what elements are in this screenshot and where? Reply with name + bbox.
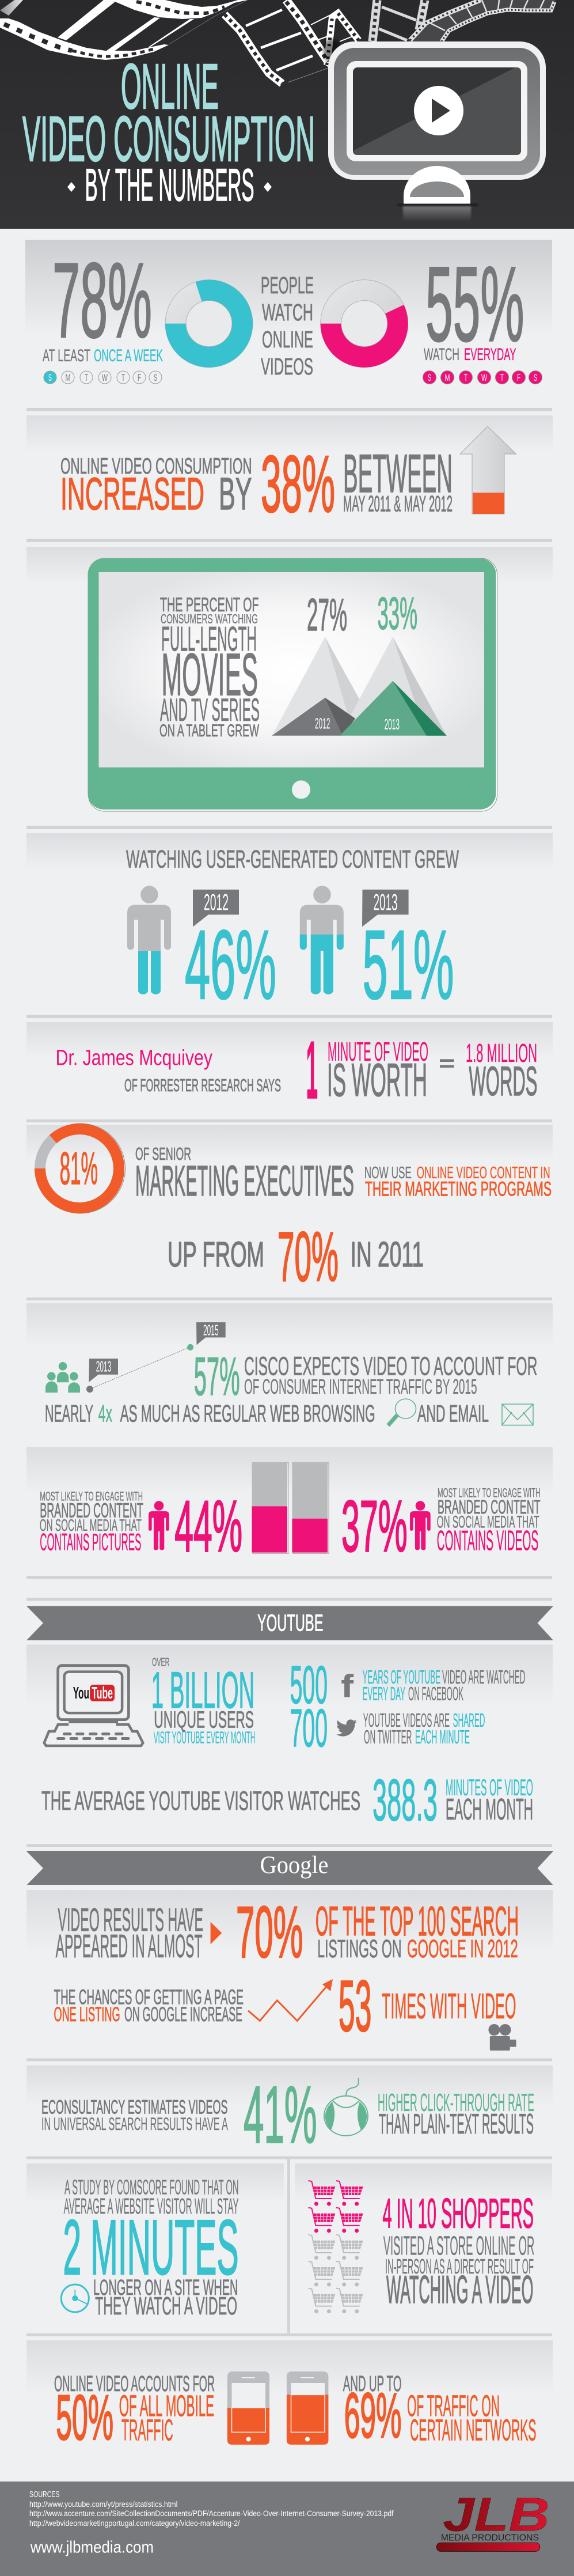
panel: James Mcquivey quote: MINUTE OF VIDEO [328,1037,428,1066]
panel: senior marketing executives: 70% [278,1217,339,1296]
weekday dots: once a week [44,371,162,384]
chart: bar 44% [252,1462,288,1553]
equals sign [440,1059,454,1068]
logo: JLB Media Productions [436,2488,549,2551]
icon: pink person right [410,1501,431,1550]
panel: branded content engagement [26,1447,553,1567]
panel: tablet movies: MOVIES [161,642,258,709]
icon: person 2013 [300,886,344,994]
text: pictures audience: ON SOCIAL MEDIA THAT [40,1516,142,1535]
icon: monitor with play button [324,39,546,221]
panel: Cisco forecast: 57% [194,1346,240,1406]
panel: tablet movies: FULL-LENGTH [161,620,257,658]
film strip: top grey frames [372,0,425,41]
panel: mobile traffic: 50% [56,2382,113,2453]
panel: comScore study: AVERAGE A WEBSITE VISITOR WILL STAY [64,2195,239,2219]
panel: shoppers [295,2163,552,2313]
weekday dots: once a week: F [138,372,141,383]
weekday dots: once a week: S [154,372,157,383]
icon: computer mouse [324,2078,368,2136]
text: unique users: UNIQUE USERS [154,1706,254,1733]
icon: phone 50% [227,2371,269,2445]
panel: Google stats: VIDEO RESULTS HAVE [58,1901,203,1938]
text: and email: AND EMAIL [417,1400,489,1427]
panel: senior marketing executives: 81% [60,1143,98,1194]
text: up from: UP FROM [168,1235,264,1274]
icon: video camera [488,2024,516,2051]
icon: clock [61,2284,89,2312]
header banner [0,0,574,229]
text: percent of consumers [159,594,260,740]
panel: Google stats: 70% [236,1892,303,1973]
text: pictures audience [40,1489,143,1556]
panel: mobile traffic: TRAFFIC [121,2414,173,2448]
panel: weekly and daily viewers: 78% [52,241,152,360]
icon: pink person left [149,1501,169,1550]
panel: YouTube stats: 500 [290,1655,328,1715]
text: videos audience [437,1486,540,1557]
panel: weekly and daily viewers [25,240,552,384]
panel: branded content engagement: 44% [174,1485,242,1567]
weekday dots: everyday: T [500,372,504,383]
centre text: people watch online videos: WATCH [262,299,313,326]
weekday dots: once a week: T [85,372,88,383]
label: everyday: EVERYDAY [464,345,516,364]
panel: econsultancy click-through [26,2066,553,2160]
weekday dots: once a week: W [102,372,108,383]
text: one listing: ONE LISTING [54,2003,120,2026]
panel: mobile traffic [26,2340,553,2453]
panel: 38% increase: 38% [261,439,335,529]
donut chart: 78% [165,280,253,368]
text: pictures audience: BRANDED CONTENT [40,1499,143,1522]
text: on google increase: ON GOOGLE INCREASE [124,2003,242,2026]
panel: James Mcquivey quote: IS WORTH [327,1054,427,1106]
panel: YouTube stats: YOUTUBE VIDEOS ARE [363,1709,450,1731]
panel: econsultancy click-through: 41% [244,2070,317,2160]
callout: 2013: 2013 [374,890,398,915]
panel: user-generated content [26,833,553,1000]
weekday dots: everyday: T [464,372,467,383]
weekday dots: everyday: S [534,372,537,383]
panel: branded content engagement: CONTAINS PICTURES [40,1529,141,1556]
weekday dots: everyday: M [444,372,450,383]
weekday dots: once a week: M [66,372,70,383]
panel: tablet movies [26,547,553,811]
text: by: BY [219,468,252,519]
text: of senior: OF SENIOR [135,1144,191,1164]
callout: 2012 [193,890,239,926]
text: percent of consumers: THE PERCENT OF [160,594,259,616]
weekday dots: once a week: T [121,372,125,383]
name: Dr. James Mcquivey [56,1046,212,1071]
text: online video consumption: ONLINE VIDEO CONSUMPTION [60,454,252,479]
panel: YouTube stats: YEARS OF YOUTUBE [363,1666,440,1688]
banner: YouTube: YOUTUBE [257,1609,324,1636]
panel: James Mcquivey quote: 1 [306,1024,318,1116]
callout: 2013 [362,890,409,926]
YouTube logo: You [73,1684,89,1703]
film strip: right curved ribbon [409,0,556,41]
callout: 2012: 2012 [204,890,229,915]
icon: magnifying glass [388,1399,416,1425]
label: once a week: ONCE A WEEK [94,346,163,365]
weekday dots: once a week: S [48,372,52,383]
text: longer on a site when: LONGER ON A SITE WHEN [93,2276,238,2300]
sources list [29,2490,394,2528]
panel: 38% increase [26,415,553,529]
panel: tablet movies: AND TV SERIES [160,691,260,728]
weekday dots: everyday: F [517,372,520,383]
panel: branded content engagement: 37% [341,1485,408,1567]
panel: mobile traffic: ONLINE VIDEO ACCOUNTS FOR [54,2372,215,2396]
panel: Cisco forecast [26,1303,553,1427]
panel: user-generated content: 51% [363,910,454,1020]
logo: JLB Media Productions: JLB [443,2488,549,2541]
sources list: http://www.youtube.com/yt/press/statistics.html [29,2500,177,2509]
panel: YouTube stats: EACH MINUTE [415,1726,470,1747]
source: OF FORRESTER RESEARCH SAYS [124,1076,281,1095]
panel: user-generated content: 46% [185,910,276,1020]
text: pictures audience: MOST LIKELY TO ENGAGE WITH [40,1489,143,1504]
text: percent of consumers: ON A TABLET GREW [159,721,259,740]
banner: Google: Google [260,1852,328,1879]
icon: person 2012 [127,886,171,994]
logo: JLB Media Productions: MEDIA PRODUCTIONS [441,2533,539,2543]
website: www.jlbmedia.com [30,2539,154,2557]
text: now use: NOW USE [364,1164,412,1182]
text: universal search: IN UNIVERSAL SEARCH RESULTS HAVE A [41,2113,228,2134]
centre text: people watch online videos [261,272,314,380]
icon: group of people [45,1362,80,1393]
text: econsultancy estimates: ECONSULTANCY ESTIMATES VIDEOS [41,2096,228,2118]
sources list: SOURCES [29,2490,60,2499]
chart: mountains 2012 vs 2013 [272,637,447,736]
weekday dots: everyday: S [428,372,431,383]
weekday dots: everyday: W [481,372,487,383]
text: listings on: LISTINGS ON [317,1935,402,1963]
text: 4x: 4x [98,1400,112,1427]
panel: Google stats: 53 [339,1965,371,2047]
icon: tablet [88,558,497,811]
title [22,51,315,210]
icon: zigzag growth arrow [248,1979,333,2021]
film strip: left ribbon [0,0,248,60]
callout: 2015: 2015 [203,1321,219,1338]
icon: growth arrow [460,426,516,514]
panel: YouTube stats: ON FACEBOOK [408,1683,463,1704]
panel: YouTube stats: 388.3 [372,1766,438,1833]
callout: 2013 [89,1358,118,1382]
chart: mountains 2012 vs 2013: 2012 [315,715,330,732]
icon: computer with YouTube logo [44,1666,143,1746]
panel: Google stats [26,1890,553,2051]
label: watch: WATCH [424,345,459,364]
label: at least: AT LEAST [43,346,90,365]
icon: shopping carts 4 of 10 [308,2181,363,2313]
text: increased: INCREASED [60,468,204,519]
icon: facebook f: f [341,1668,353,1704]
panel: tablet movies: 33% [378,588,417,638]
YouTube logo: Tube [92,1684,113,1703]
banner: Google [26,1851,553,1885]
centre text: people watch online videos: PEOPLE [261,272,314,298]
panel: comScore study: A STUDY BY COMSCORE FOUND THAT ON [64,2175,239,2199]
panel: YouTube stats [26,1644,553,1833]
panel: YouTube stats: 1 BILLION [151,1661,254,1719]
panel: comScore study: 2 MINUTES [63,2204,239,2291]
banner: YouTube [26,1606,553,1640]
film strip: centre ribbon [225,0,359,84]
panel: YouTube stats: 700 [290,1698,328,1758]
title: BY THE NUMBERS [85,159,254,210]
icon: orange pointer [211,1922,222,1944]
panel: YouTube stats: EVERY DAY [363,1683,405,1704]
panel: tablet movies: 27% [307,589,347,640]
text: in 2011: IN 2011 [350,1235,424,1274]
text: nearly: NEARLY [45,1400,93,1427]
panel: mobile traffic: AND UP TO [343,2372,402,2396]
text: percent of consumers: CONSUMERS WATCHING [161,611,258,626]
callout: 2013: 2013 [96,1358,111,1375]
panel: mobile traffic: OF ALL MOBILE [119,2390,214,2423]
panel: Google stats: APPEARED IN ALMOST [56,1928,203,1964]
monitor stand [397,166,478,221]
text: they watch a video: THEY WATCH A VIDEO [95,2293,237,2320]
centre text: people watch online videos: ONLINE [262,326,313,353]
icon: phone 69% [287,2371,328,2445]
panel: James Mcquivey quote [26,1022,553,1116]
chart: bar 37% [292,1462,329,1553]
sources list: http://webvideomarketingportugal.com/category/video-marketing-2/ [29,2519,240,2528]
panel: mobile traffic: 69% [344,2381,402,2452]
icon: twitter bird [336,1719,357,1737]
centre text: people watch online videos: VIDEOS [261,353,313,380]
panel: senior marketing executives [26,1124,553,1296]
text: chances of getting a page: THE CHANCES OF GETTING A PAGE [54,1986,244,2009]
panel: YouTube stats: VISIT YOUTUBE EVERY MONTH [154,1729,255,1747]
panel: YouTube stats: SHARED [453,1709,485,1731]
panel: YouTube stats: ON TWITTER [364,1726,412,1747]
panel: comScore study [26,2163,284,2320]
sources list: http://www.accenture.com/SiteCollectionDocuments/PDF/Accenture-Video-Over-Internet-Consumer-Survey-2013.pdf [29,2509,394,2518]
footer [0,2482,574,2576]
donut chart: 55% [321,280,408,368]
text: over: OVER [152,1656,169,1669]
weekday dots: everyday [423,371,542,384]
trend line: 2013 to 2015 [86,1344,193,1393]
donut chart: 81% [35,1124,126,1213]
callout: 2015 [196,1321,226,1345]
chart: mountains 2012 vs 2013: 2013 [385,716,400,733]
title: ONLINE [121,51,219,122]
panel: 38% increase: MAY 2011 & MAY 2012 [343,492,453,516]
icon: envelope [502,1404,533,1425]
